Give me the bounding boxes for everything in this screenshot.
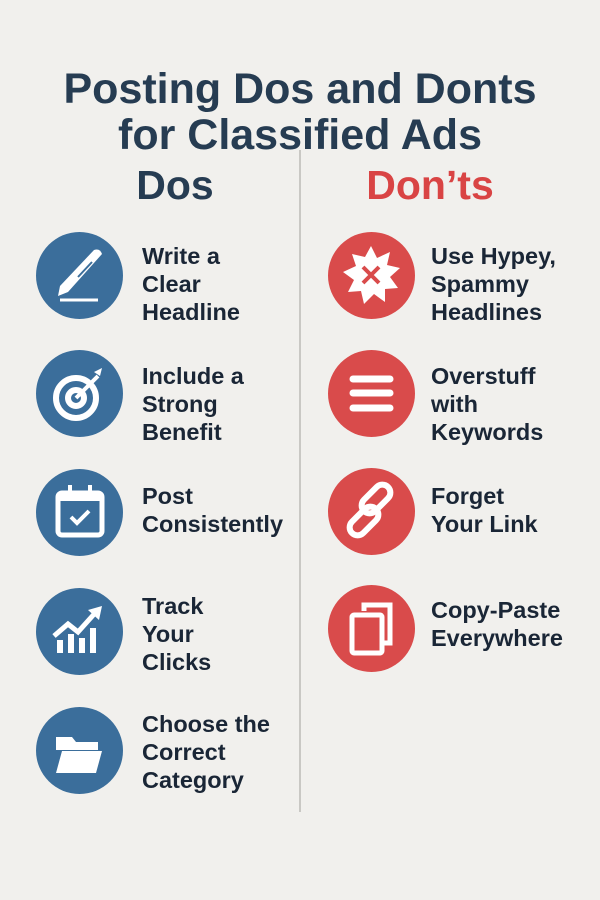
icon: link <box>328 468 415 555</box>
divider <box>299 150 301 812</box>
icon: pen <box>36 232 123 319</box>
text: Copy-Paste Everywhere <box>431 597 563 651</box>
text: Use Hypey, Spammy Headlines: Spammy <box>431 271 529 297</box>
text: Post Consistently <box>142 483 283 537</box>
text: Include a Strong Benefit: Include a <box>142 363 244 389</box>
text: Overstuff with Keywords <box>431 363 543 445</box>
text: Overstuff with Keywords: Overstuff <box>431 363 535 389</box>
text: Forget Your Link: Forget <box>431 483 504 509</box>
text: Overstuff with Keywords: with <box>431 391 478 417</box>
heading: Don'ts: Don’ts <box>366 162 494 208</box>
text: Choose the Correct Category: Category <box>142 767 244 793</box>
heading: Dos: Dos <box>136 162 214 208</box>
icon: copy <box>328 585 415 672</box>
title: Posting Dos and Donts <box>64 65 536 113</box>
icon: folder <box>36 707 123 794</box>
icon: target <box>36 350 123 437</box>
text: Include a Strong Benefit <box>142 363 244 445</box>
text: Post Consistently: Consistently <box>142 511 283 537</box>
text: Forget Your Link: Your Link <box>431 511 538 537</box>
icon: burst x <box>328 232 415 319</box>
title <box>64 65 536 159</box>
icon: lines <box>328 350 415 437</box>
text: Copy-Paste Everywhere: Everywhere <box>431 625 563 651</box>
text: Forget Your Link <box>431 483 538 537</box>
text: Track Your Clicks: Track <box>142 593 203 619</box>
text: Write a Clear Headline <box>142 243 240 325</box>
title: for Classified Ads <box>118 111 482 159</box>
text: Include a Strong Benefit: Strong <box>142 391 218 417</box>
text: Use Hypey, Spammy Headlines: Use Hypey, <box>431 243 556 269</box>
text: Track Your Clicks <box>142 593 211 675</box>
text: Overstuff with Keywords: Keywords <box>431 419 543 445</box>
text: Post Consistently: Post <box>142 483 193 509</box>
text: Write a Clear Headline: Headline <box>142 299 240 325</box>
text: Use Hypey, Spammy Headlines <box>431 243 556 325</box>
icon: chart <box>36 588 123 675</box>
text: Write a Clear Headline: Write a <box>142 243 220 269</box>
text: Track Your Clicks: Your <box>142 621 194 647</box>
text: Use Hypey, Spammy Headlines: Headlines <box>431 299 542 325</box>
text: Copy-Paste Everywhere: Copy-Paste <box>431 597 560 623</box>
text: Choose the Correct Category <box>142 711 270 793</box>
text: Choose the Correct Category: Correct <box>142 739 226 765</box>
text: Write a Clear Headline: Clear <box>142 271 201 297</box>
text: Include a Strong Benefit: Benefit <box>142 419 222 445</box>
text: Choose the Correct Category: Choose the <box>142 711 270 737</box>
icon: calendar <box>36 469 123 556</box>
text: Track Your Clicks: Clicks <box>142 649 211 675</box>
